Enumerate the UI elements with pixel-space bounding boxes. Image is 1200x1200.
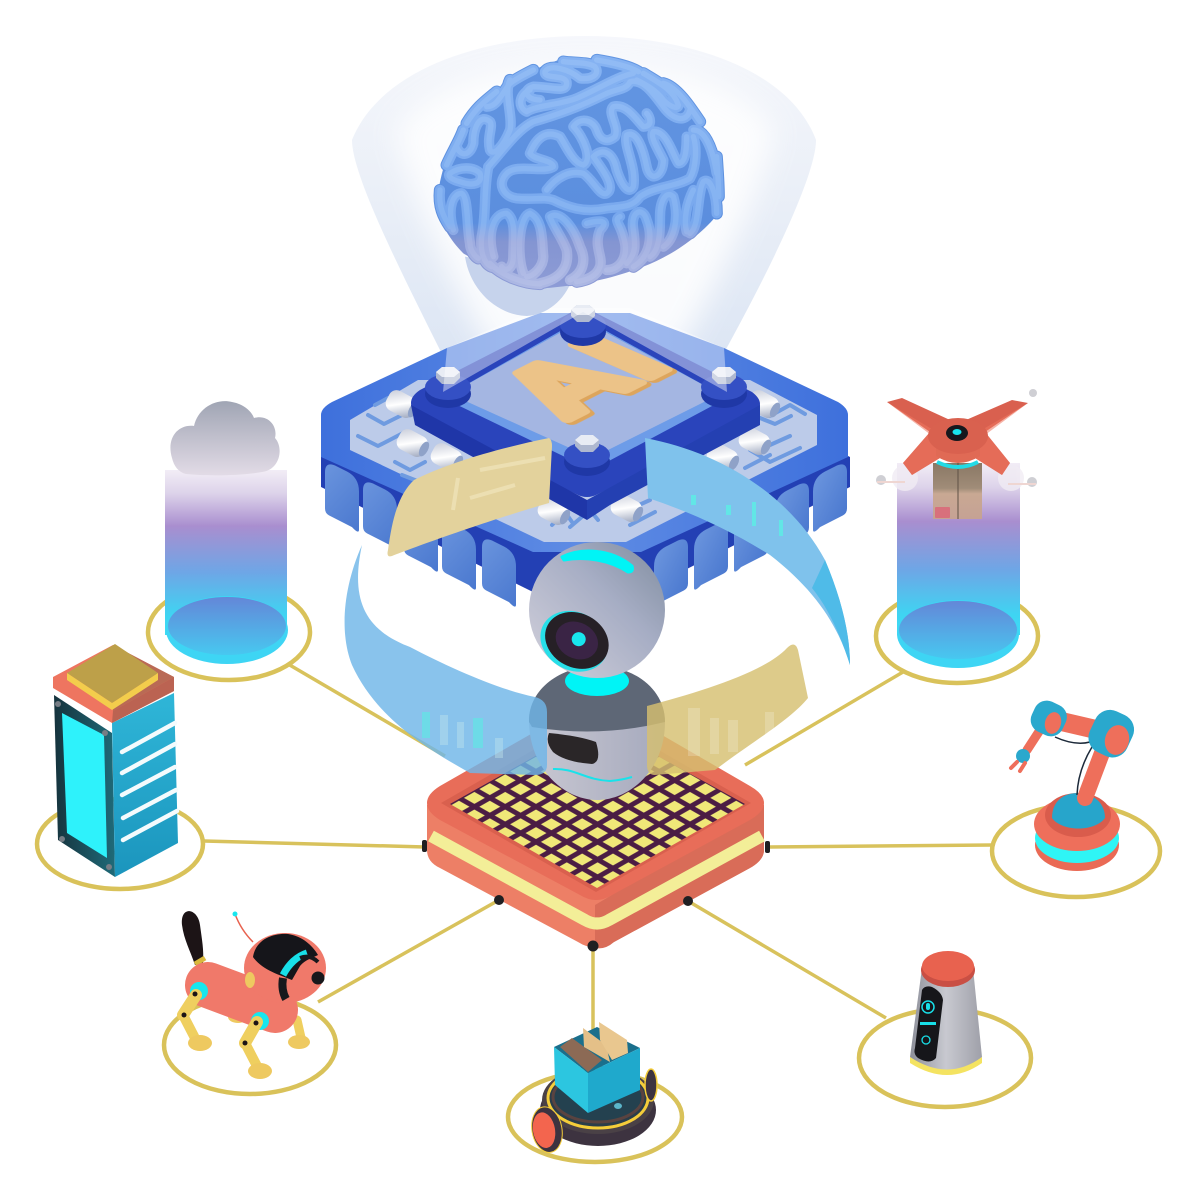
smart speaker [910,951,982,1075]
server cap [53,645,174,723]
dog front legs [190,982,208,1000]
robot eye [530,599,619,683]
robot screen [548,733,598,764]
box [554,1027,640,1073]
AI letters: AI [466,323,697,431]
arm joints [1083,705,1139,763]
prop guards [892,465,1024,491]
arm base [1034,793,1120,871]
speaker top [921,953,975,987]
brain base [437,57,722,288]
robot neck light [565,666,629,696]
speaker body [910,968,982,1071]
circuit panel [350,380,817,542]
platform top [427,702,764,900]
hologram cone [352,36,816,360]
platform [427,700,764,948]
parcel [933,463,982,519]
server cyan screen [62,713,107,858]
server rack [53,644,178,877]
arm cable [1055,737,1092,795]
dark plate [411,309,760,497]
drone with parcel [876,389,1037,519]
curved screen: blue top-right [645,438,850,665]
chip rim [321,313,848,552]
dog body [208,985,275,1010]
arm links [1085,753,1102,798]
server front frame [54,695,115,877]
server side [112,693,178,877]
platform side [427,700,764,948]
brain [437,57,722,316]
dog back legs [297,1020,302,1042]
curved screen: yellow lower-right [647,644,808,775]
beam wash on chip top [443,308,727,392]
dog tail [182,911,203,965]
chip bolts [425,305,747,476]
silver capacitors [383,387,782,528]
robot dog [182,911,326,1079]
curved screen: yellow top-left [388,438,552,556]
dog head [244,933,326,1003]
robot vacuum with box [528,1022,657,1155]
left wheel [528,1104,566,1155]
gold rings under devices [37,584,1160,1162]
left cylinder [165,470,288,664]
body light line [553,769,632,781]
gyri ridges [440,60,719,284]
connector nodes [422,840,770,952]
propellers [876,389,1037,487]
connector lines [204,664,992,1030]
chip feet [325,460,847,607]
robotic arm [1011,696,1139,871]
chip [321,305,850,607]
speaker icons [920,1001,936,1044]
head light [562,551,632,572]
vacuum disc [540,1074,656,1146]
dog antenna [235,914,253,942]
chip dark base [321,350,850,592]
circuit traces [358,398,805,527]
server stripes [122,723,177,840]
curved screen: blue lower-left [345,545,547,775]
LED grid [450,722,745,888]
speaker screen [914,986,943,1062]
robot head [529,542,665,678]
glowing band [431,836,762,924]
right cylinder [897,463,1020,668]
robot body [529,666,665,800]
glass plate [443,318,727,470]
server screws [55,701,112,870]
cloud icon [170,401,280,475]
drone arms [887,398,1028,475]
cerebellum [465,257,572,316]
robot [529,542,665,800]
right wheel [645,1069,657,1101]
